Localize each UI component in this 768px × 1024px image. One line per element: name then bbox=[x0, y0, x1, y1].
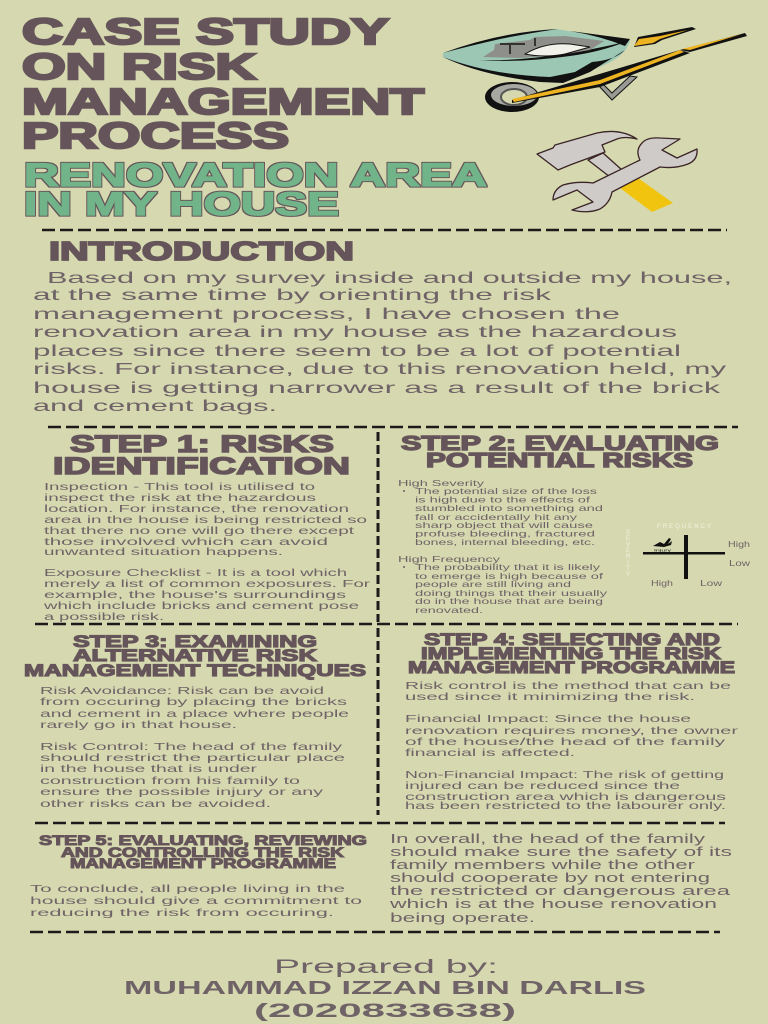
chart: risk matrix: Y bbox=[626, 572, 630, 578]
text block: introduction bbox=[33, 270, 732, 415]
text block: step 1 body: location. For instance, the renovation bbox=[44, 503, 349, 515]
subtitle: RENOVATION AREA bbox=[24, 157, 487, 193]
text block: introduction: at the same time by orienting the risk bbox=[33, 287, 553, 304]
title: PROCESS bbox=[22, 115, 289, 156]
text block: step 1 body: area in the house is being restricted so bbox=[44, 514, 367, 526]
heading: step 5: AND CONTROLLING THE RISK bbox=[61, 845, 344, 860]
icon: wheelbarrow bbox=[443, 27, 747, 112]
heading: step 5: MANAGEMENT PROGRAMME bbox=[70, 856, 336, 871]
text block: introduction: renovation area in my house as the hazardous bbox=[33, 324, 677, 341]
text block: step 4 body: Non-Financial Impact: The risk of getting bbox=[405, 769, 724, 781]
text block: step 4 body: Financial Impact: Since the house bbox=[405, 713, 691, 725]
text block: step 5 conclusion: house should give a commitment to bbox=[30, 895, 362, 907]
text block: step 1 body: inspect the risk at the hazardous bbox=[44, 492, 316, 504]
panel: step 2 bbox=[398, 433, 750, 615]
text block: introduction: places since there seem to be a lot of potential bbox=[33, 343, 681, 360]
text block: step 1 body: Inspection - This tool is utilised to bbox=[44, 481, 315, 493]
chart: risk matrix: S bbox=[626, 530, 630, 536]
text block: high frequency: High Frequency bbox=[398, 554, 501, 564]
text block: overall: family members while the other bbox=[390, 857, 696, 872]
text block: high severity: stumbled into something and bbox=[415, 503, 603, 513]
text block: overall: should make sure the safety of its bbox=[390, 844, 733, 859]
subtitle: IN MY HOUSE bbox=[24, 186, 339, 222]
chart: risk matrix: High bbox=[728, 540, 750, 549]
heading: step 3: STEP 3: EXAMINING bbox=[73, 632, 317, 651]
text block: introduction: and cement bags. bbox=[33, 398, 277, 415]
text block: step 1 body: which include bricks and cement pose bbox=[42, 600, 359, 612]
text block: step 5 conclusion bbox=[30, 883, 362, 919]
text block: high severity: High Severity bbox=[398, 478, 485, 488]
chart: risk matrix: E bbox=[626, 548, 630, 554]
text block: high frequency: people are still living and bbox=[415, 579, 571, 589]
text block: overall: which is at the house renovation bbox=[388, 896, 717, 911]
heading: step 3 bbox=[24, 632, 366, 680]
text block: step 4 body: renovation requires money, the owner bbox=[405, 725, 739, 737]
heading: step 4 bbox=[408, 631, 735, 677]
heading: step 2: STEP 2: EVALUATING bbox=[401, 433, 719, 455]
text block: overall: should cooperate by not entering bbox=[390, 870, 710, 885]
text block: high frequency: doing things that their usually bbox=[415, 588, 608, 598]
text block: step 3 body: and cement in a place where people bbox=[40, 708, 349, 720]
text block: step 4 body: of the house/the head of the family bbox=[405, 736, 726, 748]
text block: overall: the restricted or dangerous area bbox=[390, 883, 731, 898]
heading: step 4: STEP 4: SELECTING AND bbox=[424, 631, 720, 649]
text block: step 3 body: Risk Avoidance: Risk can be avoid bbox=[40, 685, 324, 697]
text block: step 3 body bbox=[40, 685, 349, 810]
heading: step 2 bbox=[401, 433, 719, 472]
title: ON RISK bbox=[22, 46, 256, 87]
heading: step 1 bbox=[53, 431, 350, 480]
text block: high severity: is high due to the effects of bbox=[415, 494, 591, 504]
chart: risk matrix: E bbox=[626, 536, 630, 542]
text block: step 3 body: Risk Control: The head of the family bbox=[40, 741, 343, 753]
chart: risk matrix bbox=[626, 524, 750, 588]
panel: step 4 bbox=[405, 631, 739, 812]
heading: step 3: ALTERNATIVE RISK bbox=[73, 646, 318, 665]
text block: high frequency: do in the house that are being bbox=[415, 596, 603, 606]
chart: risk matrix: I bbox=[627, 560, 629, 566]
text block: high severity: The potential size of the loss bbox=[415, 486, 597, 496]
text block: high severity: profuse bleeding, fractured bbox=[415, 528, 595, 538]
heading: step 2: POTENTIAL RISKS bbox=[426, 450, 693, 472]
credits: prepared by: (2020833638) bbox=[254, 1001, 516, 1022]
text block: step 1 body: that there no one will go there except bbox=[44, 525, 354, 537]
text block: step 4 body: has been restricted to the labourer only. bbox=[405, 800, 726, 812]
text block: high frequency bbox=[398, 554, 608, 615]
text block: step 4 body: injured can be reduced since the bbox=[405, 780, 680, 792]
text block: introduction: management process, I have chosen the bbox=[33, 306, 620, 323]
chart: risk matrix: V bbox=[626, 542, 630, 548]
panel: step 3 bbox=[24, 632, 366, 810]
credits: prepared by bbox=[124, 957, 646, 1022]
text block: step 4 body: Risk control is the method that can be bbox=[405, 680, 731, 692]
title bbox=[22, 11, 424, 156]
heading: introduction: INTRODUCTION bbox=[49, 236, 354, 266]
text block: step 1 body: example, the house's surroundings bbox=[44, 589, 346, 601]
text block: step 4 body bbox=[405, 680, 739, 812]
text block: high severity bbox=[398, 478, 603, 547]
icon: hammer and wrench bbox=[537, 131, 697, 212]
heading: step 1: STEP 1: RISKS bbox=[70, 431, 334, 458]
text block: step 1 body: merely a list of common exposures. For bbox=[44, 578, 371, 590]
chart: risk matrix: Low bbox=[729, 559, 750, 568]
text block: step 3 body: from occuring by placing the bricks bbox=[40, 696, 347, 708]
heading: step 4: MANAGEMENT PROGRAMME bbox=[408, 659, 735, 677]
heading: step 4: IMPLEMENTING THE RISK bbox=[421, 645, 721, 663]
chart: risk matrix: Low bbox=[700, 579, 722, 588]
text block: introduction: risks. For instance, due to this renovation held, my bbox=[33, 361, 726, 378]
text block: step 1 body: unwanted situation happens. bbox=[44, 546, 283, 558]
heading: step 3: MANAGEMENT TECHNIQUES bbox=[24, 661, 366, 680]
text block: high frequency: The probability that it is likely bbox=[415, 562, 601, 572]
text block: step 5 conclusion: To conclude, all people living in the bbox=[30, 883, 345, 895]
credits: prepared by: MUHAMMAD IZZAN BIN DARLIS bbox=[124, 978, 646, 998]
text block: high severity: fall or accidentally hit any bbox=[415, 512, 578, 522]
heading: step 5: STEP 5: EVALUATING, REVIEWING bbox=[39, 833, 367, 848]
chart: risk matrix: FREQUENCY bbox=[657, 524, 711, 530]
panel: step 5 bbox=[30, 831, 733, 925]
text block: overall bbox=[388, 831, 733, 925]
text block: high severity: sharp object that will cause bbox=[415, 520, 593, 530]
text block: step 1 body bbox=[42, 481, 371, 623]
heading: step 1: IDENTIFICATION bbox=[53, 453, 350, 480]
chart: risk matrix: R bbox=[626, 554, 631, 560]
title: MANAGEMENT bbox=[22, 81, 424, 122]
text block: step 4 body: construction area which is dangerous bbox=[405, 791, 726, 803]
chart: risk matrix: T bbox=[626, 566, 630, 572]
credits: prepared by: Prepared by: bbox=[274, 957, 498, 978]
text block: step 3 body: construction from his family to bbox=[40, 775, 300, 787]
icon: injury figure: Injury bbox=[654, 548, 671, 552]
text block: step 1 body: a possible risk. bbox=[44, 611, 164, 623]
text block: step 4 body: used since it minimizing the risk. bbox=[405, 691, 695, 703]
text block: step 3 body: should restrict the particular place bbox=[40, 752, 345, 764]
text block: step 3 body: rarely go in that house. bbox=[40, 719, 237, 731]
panel: step 1 bbox=[42, 431, 371, 623]
heading: step 5 bbox=[39, 833, 367, 871]
text block: step 1 body: those involved which can avoid bbox=[44, 536, 328, 548]
text block: high frequency: to emerge is high because of bbox=[415, 571, 604, 581]
text block: step 1 body: Exposure Checklist - It is a tool which bbox=[44, 567, 347, 579]
text block: step 4 body: financial is affected. bbox=[405, 747, 575, 759]
text block: high severity: bones, internal bleeding, etc. bbox=[415, 537, 595, 547]
text block: step 3 body: other risks can be avoided. bbox=[40, 798, 271, 810]
subtitle bbox=[24, 157, 487, 222]
text block: step 3 body: ensure the possible injury or any bbox=[40, 786, 324, 798]
chart: risk matrix: High bbox=[651, 579, 673, 588]
text block: step 5 conclusion: reducing the risk from occuring. bbox=[30, 907, 334, 919]
title: CASE STUDY bbox=[22, 11, 389, 52]
divider under title bbox=[42, 229, 727, 231]
text block: high frequency: renovated. bbox=[415, 605, 483, 615]
text block: introduction: Based on my survey inside and outside my house, bbox=[47, 270, 732, 287]
text block: introduction: house is getting narrower as a result of the brick bbox=[33, 380, 722, 397]
text block: step 3 body: in the house that is under bbox=[40, 763, 258, 775]
text block: overall: being operate. bbox=[390, 910, 535, 925]
text block: overall: In overall, the head of the family bbox=[390, 831, 706, 846]
